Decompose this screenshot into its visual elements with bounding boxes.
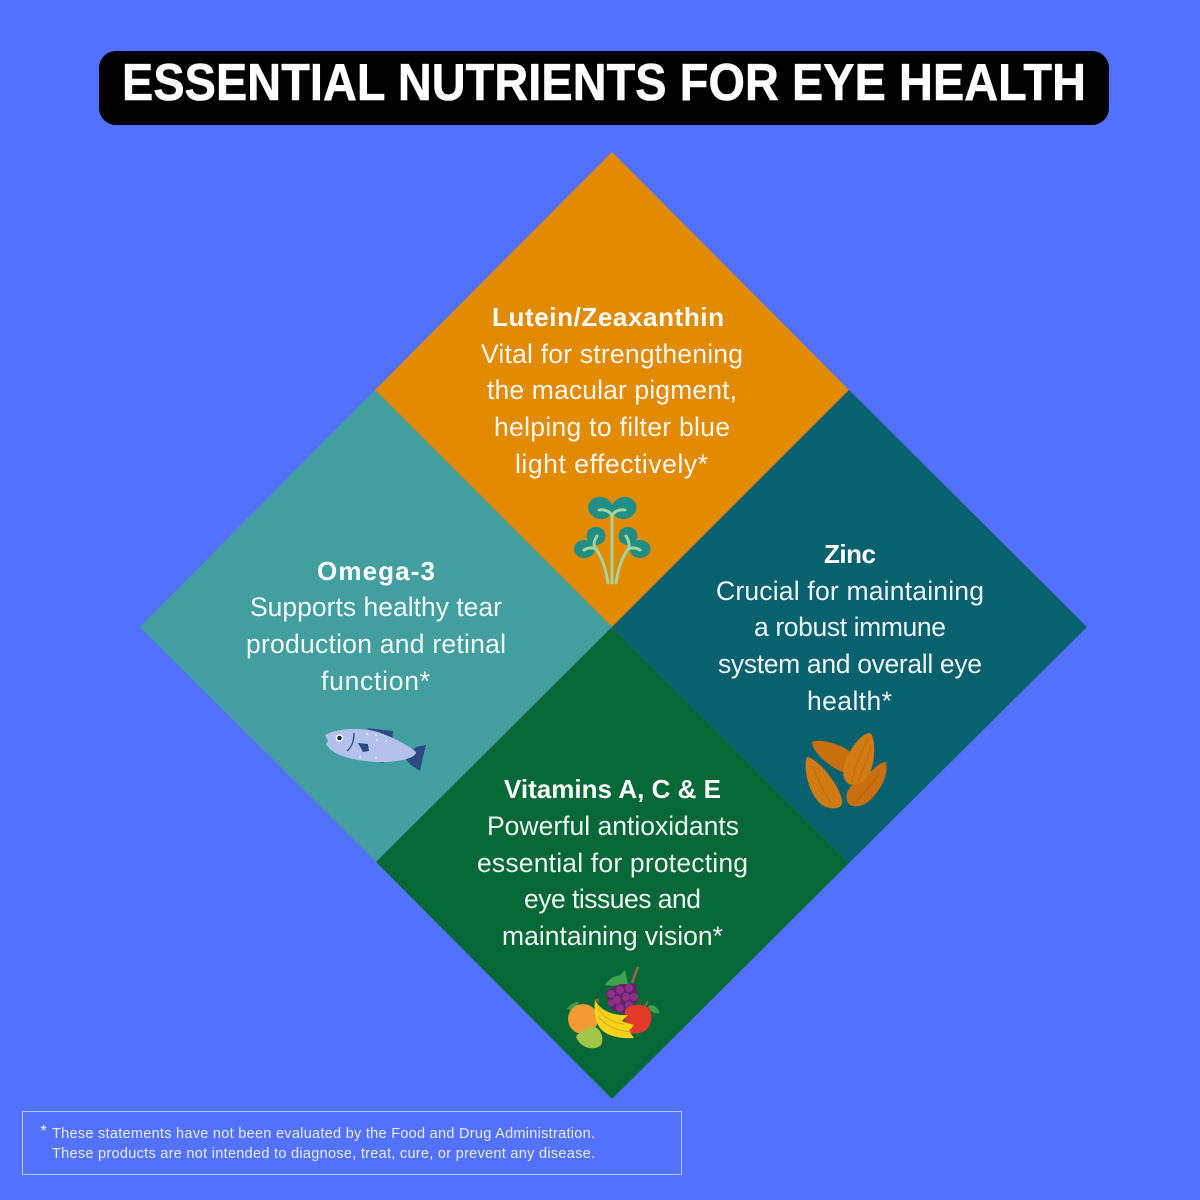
panel: Omega-3 <box>140 390 612 862</box>
heading: Omega-3: Omega-3 <box>317 556 435 586</box>
text block: Omega-3 description: function* <box>321 666 430 696</box>
heading: Lutein/Zeaxanthin: Lutein/Zeaxanthin <box>492 302 724 332</box>
text block: Vitamins description: Powerful antioxidants <box>487 811 739 841</box>
heading: Zinc: Zinc <box>824 539 876 569</box>
text block: Lutein description: light effectively* <box>515 449 708 479</box>
icon: fruit <box>567 967 660 1048</box>
panel: Zinc <box>612 390 1087 863</box>
icon: fish <box>325 728 426 771</box>
text block: Omega-3 description <box>246 592 506 696</box>
text block: Zinc description: system and overall eye <box>718 649 982 679</box>
text block: Zinc description: a robust immune <box>754 612 946 642</box>
text block: Lutein description: Vital for strengthening <box>481 339 743 369</box>
panel: Lutein/Zeaxanthin <box>375 152 849 627</box>
text block: Lutein description <box>481 339 743 479</box>
text block: Vitamins description: essential for protecting <box>477 848 748 878</box>
footnote text: These products are not intended to diagnose, treat, cure, or prevent any disease. <box>52 1146 595 1162</box>
text block: Zinc description <box>716 576 984 716</box>
text block: Lutein description: helping to filter blue <box>494 412 730 442</box>
icon: almonds <box>805 733 887 808</box>
footnote text <box>52 1126 595 1162</box>
text block: Vitamins description: eye tissues and <box>524 884 701 914</box>
text block: Vitamins description: maintaining vision* <box>502 921 723 951</box>
asterisk: * <box>40 1123 47 1140</box>
panel: Vitamins A, C & E <box>376 627 849 1099</box>
heading: Vitamins A, C & E: Vitamins A, C & E <box>504 774 721 804</box>
footnote box <box>22 1112 682 1174</box>
icon: sprout <box>574 494 650 583</box>
title: ESSENTIAL NUTRIENTS FOR EYE HEALTH <box>122 54 1086 112</box>
text block: Zinc description: health* <box>807 686 892 716</box>
text block: Vitamins description <box>477 811 748 951</box>
text block: Zinc description: Crucial for maintaining <box>716 576 984 606</box>
footnote text: These statements have not been evaluated by the Food and Drug Administration. <box>52 1126 595 1142</box>
text block: Omega-3 description: production and retinal <box>246 629 506 659</box>
text block: Omega-3 description: Supports healthy tear <box>250 592 502 622</box>
text block: Lutein description: the macular pigment, <box>487 375 737 405</box>
